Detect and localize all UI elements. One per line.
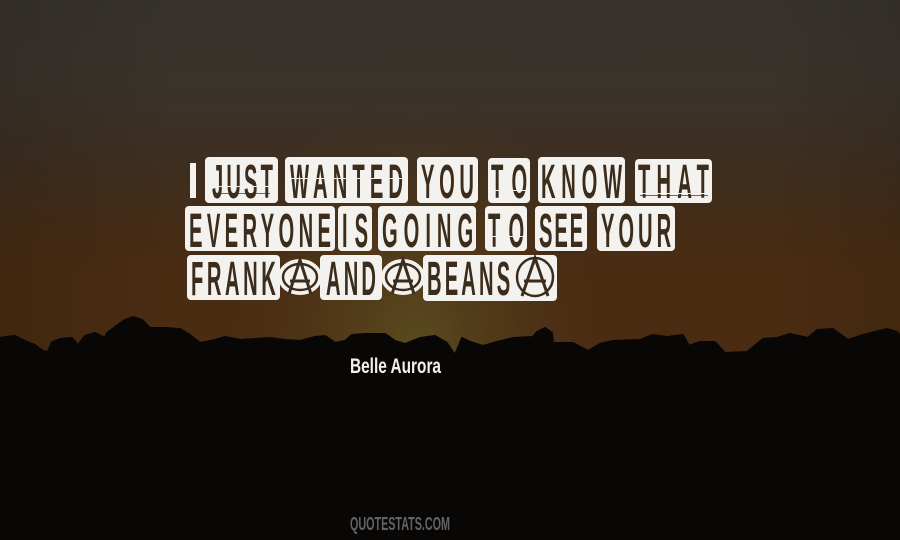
quote line 2: SEE xyxy=(539,204,583,257)
quote line 1: TO xyxy=(491,155,527,208)
quote line 2: GOING xyxy=(382,204,473,257)
quote line 2: IS xyxy=(342,204,368,257)
watermark: QUOTESTATS.COM xyxy=(350,514,450,534)
author name: Belle Aurora xyxy=(350,355,441,378)
quote line 1: YOU xyxy=(421,155,474,208)
quote line 3: AND xyxy=(326,252,376,305)
icon: anarchy symbol 3 xyxy=(517,258,553,296)
quote line 3: BEANS xyxy=(427,252,510,305)
icon: anarchy symbol 1 xyxy=(280,260,320,294)
quote line 1: WANTED xyxy=(290,155,403,208)
quote line 1: JUST xyxy=(212,155,273,208)
quote line 1: I xyxy=(190,197,191,199)
quote line 3: FRANK xyxy=(191,252,276,305)
mountain silhouette xyxy=(0,317,900,540)
quote line 2 xyxy=(185,204,675,257)
icon: anarchy symbol 2 xyxy=(383,260,423,294)
quote line 1: THAT xyxy=(638,155,709,208)
quote line 3 xyxy=(187,252,557,305)
quote line 2: TO xyxy=(488,204,524,257)
background sky xyxy=(0,0,900,400)
quote line 2: EVERYONE xyxy=(189,204,331,257)
quote line 1: KNOW xyxy=(541,155,622,208)
quote line 2: YOUR xyxy=(601,204,671,257)
quote line 1 xyxy=(190,155,712,208)
quote text xyxy=(185,155,712,305)
